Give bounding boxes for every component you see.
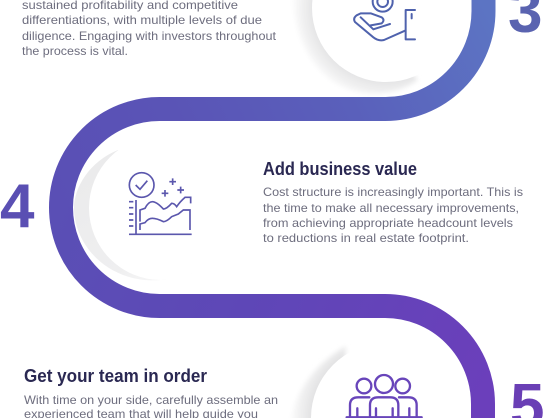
winding ribbon path	[61, 0, 484, 418]
step 4 text block: the time to make all necessary improvements,	[263, 201, 519, 215]
step 4 text block: to reductions in real estate footprint.	[263, 231, 469, 245]
step 4 text block: from achieving appropriate headcount levels	[263, 216, 513, 230]
step 5 text block	[24, 393, 278, 418]
heading: add business value: Add business value	[263, 159, 417, 179]
icon: growth chart with checkmark	[129, 173, 192, 235]
shadow: step 3 circle	[292, 0, 418, 94]
step 4 text block	[263, 185, 523, 245]
icon: hand holding coin	[354, 0, 415, 40]
heading: get your team in order: Get your team in order	[24, 366, 207, 386]
shadow: step 5 circle	[290, 346, 346, 418]
shadow: step 4 circle	[74, 150, 192, 280]
icon: team of people	[347, 375, 422, 417]
white circle: step 5	[311, 343, 461, 418]
step 3 text block: the process is vital.	[22, 44, 128, 58]
white circle: step 3	[312, 0, 460, 82]
step 3 text block	[22, 0, 277, 58]
step 3 text block: differentiations, with multiple levels of due	[22, 13, 262, 27]
step 3 text block: diligence. Engaging with investors throughout	[22, 29, 277, 43]
step 5 text block: With time on your side, carefully assemble an	[24, 393, 278, 407]
number 4: 4	[0, 172, 35, 241]
white circle: step 4	[89, 136, 233, 280]
step 4 text block: Cost structure is increasingly important. This is	[263, 185, 523, 199]
